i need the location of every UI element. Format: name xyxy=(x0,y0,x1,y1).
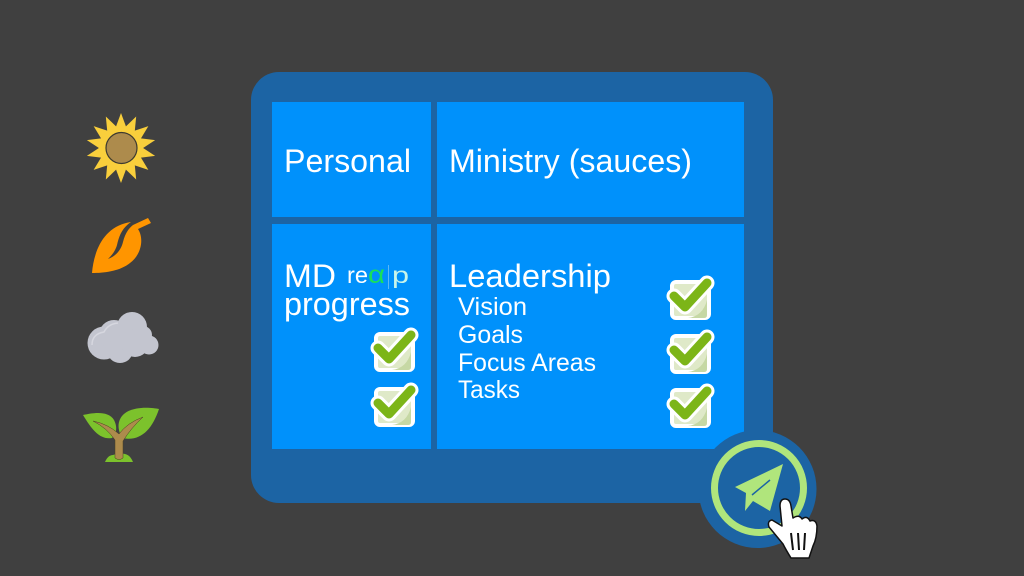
panel: board xyxy=(251,72,773,503)
heading: Personal: Personal xyxy=(284,143,411,179)
icon: orange leaf xyxy=(92,218,151,273)
text: Vision: Vision xyxy=(458,293,527,321)
icon: paper plane xyxy=(735,464,783,511)
icon: checkbox xyxy=(376,334,413,370)
heading: Leadership: Leadership xyxy=(449,258,611,294)
logo: reap: re xyxy=(347,262,368,288)
panel: MD progress xyxy=(272,224,431,449)
logo: reap: p xyxy=(392,262,409,288)
text: Focus Areas: Focus Areas xyxy=(458,349,596,377)
logo: reap xyxy=(347,261,409,289)
panel: Personal xyxy=(272,102,431,217)
icon: cloud xyxy=(88,312,158,363)
panel: Ministry xyxy=(437,102,744,217)
heading: progress: progress xyxy=(284,286,410,322)
icon: checkbox xyxy=(672,390,709,426)
logo: reap: α xyxy=(368,261,385,289)
icon: checkbox xyxy=(376,389,413,425)
icon: sunflower xyxy=(85,113,157,183)
text: Tasks: Tasks xyxy=(458,376,520,404)
heading: Ministry (sauces): Ministry (sauces) xyxy=(449,143,692,179)
text: Goals: Goals xyxy=(458,321,523,349)
icon: hand cursor xyxy=(768,499,817,558)
panel: Leadership xyxy=(437,224,744,449)
heading: MD: MD xyxy=(284,258,336,294)
icon: green seedling xyxy=(83,408,159,462)
icon: checkbox xyxy=(672,336,709,372)
icon: checkbox xyxy=(672,282,709,318)
send button xyxy=(698,430,816,548)
